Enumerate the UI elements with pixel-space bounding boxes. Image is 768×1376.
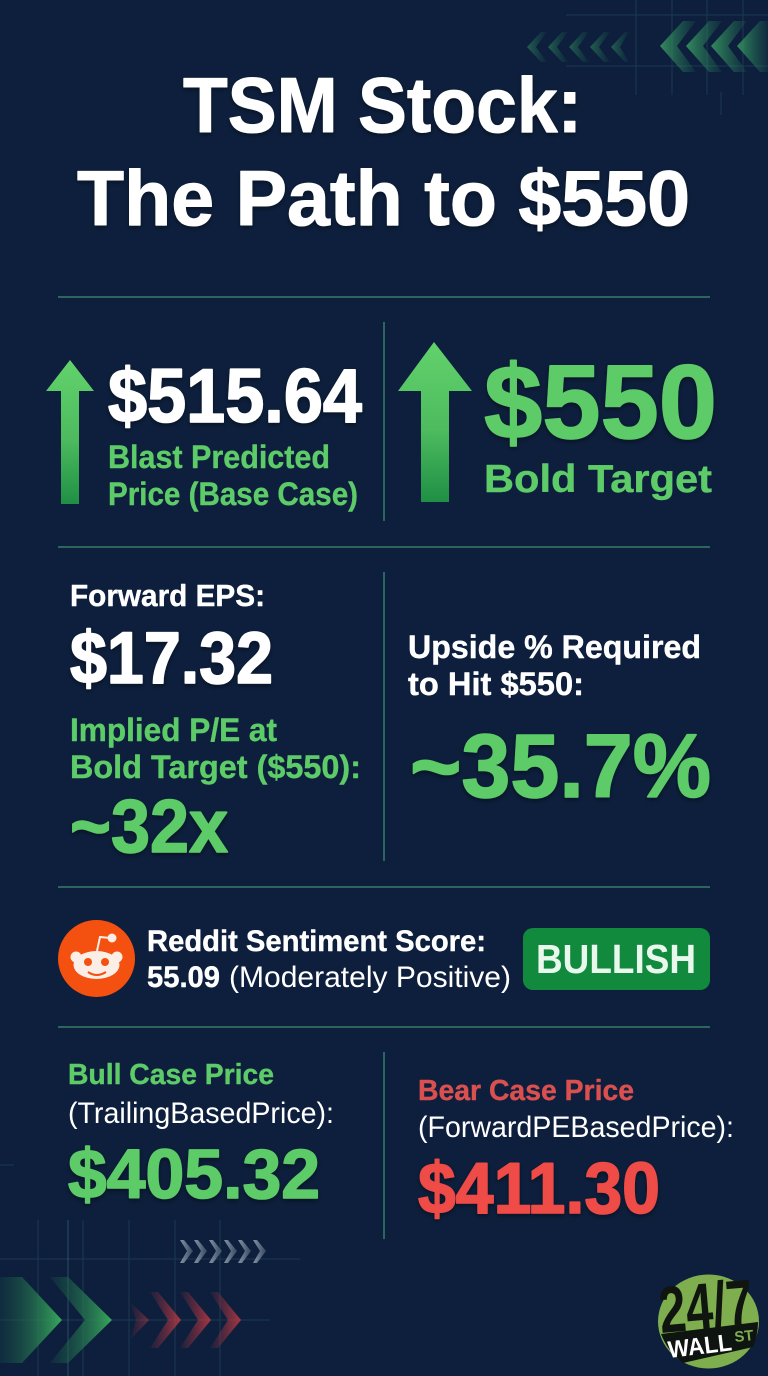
bear case label: (ForwardPEBasedPrice): — [418, 1111, 734, 1144]
implied P/E label: Implied P/E at — [70, 712, 277, 748]
implied P/E label: Bold Target ($550): — [70, 749, 361, 785]
icon: up arrow small — [46, 360, 94, 504]
implied P/E label — [70, 712, 361, 785]
panel: upside required — [408, 629, 711, 817]
sentiment text: 55.09 — [147, 961, 220, 994]
bold target value: $550 — [484, 344, 717, 461]
upside label: to Hit $550: — [408, 666, 584, 702]
icon: bottom chevrons — [0, 1240, 266, 1363]
title: TSM Stock: — [183, 61, 582, 149]
sentiment text: (Moderately Positive) — [229, 961, 511, 994]
upside label: Upside % Required — [408, 629, 701, 665]
panel: bold target — [398, 342, 717, 502]
icon: reddit logo — [58, 920, 135, 997]
bullish badge: BULLISH — [536, 936, 696, 982]
predicted price label: Price (Base Case) — [108, 476, 358, 512]
predicted price label: Blast Predicted — [108, 439, 330, 475]
title — [77, 61, 690, 242]
implied P/E value: ~32x — [70, 784, 228, 868]
forward EPS label: Forward EPS: — [70, 578, 265, 613]
upside label — [408, 629, 701, 702]
bull case value: $405.32 — [68, 1135, 320, 1213]
bull case label: Bull Case Price — [68, 1059, 274, 1091]
bull case label: (TrailingBasedPrice): — [68, 1097, 334, 1130]
panel: bull case — [68, 1059, 334, 1213]
bear case value: $411.30 — [418, 1149, 660, 1229]
upside value: ~35.7% — [410, 717, 711, 817]
panel: forward EPS and implied P/E — [70, 578, 361, 868]
bull case label — [68, 1059, 334, 1130]
bullish badge — [523, 928, 710, 990]
sentiment text — [147, 925, 511, 994]
predicted price value: $515.64 — [108, 354, 362, 439]
bold target label: Bold Target — [484, 458, 712, 501]
logo: 24/7 Wall St: ST — [734, 1327, 754, 1346]
panel: bear case — [418, 1075, 734, 1229]
panel: reddit sentiment — [58, 920, 710, 997]
sentiment text: Reddit Sentiment Score: — [147, 925, 486, 958]
panel: predicted price — [46, 354, 362, 512]
icon: top chevrons — [527, 21, 768, 72]
predicted price label — [108, 439, 358, 512]
icon: up arrow large — [398, 342, 472, 502]
forward EPS value: $17.32 — [70, 618, 273, 699]
title: The Path to $550 — [77, 154, 690, 242]
logo: 24/7 Wall St: WALL — [666, 1329, 733, 1364]
bear case label — [418, 1075, 734, 1144]
bear case label: Bear Case Price — [418, 1075, 634, 1107]
